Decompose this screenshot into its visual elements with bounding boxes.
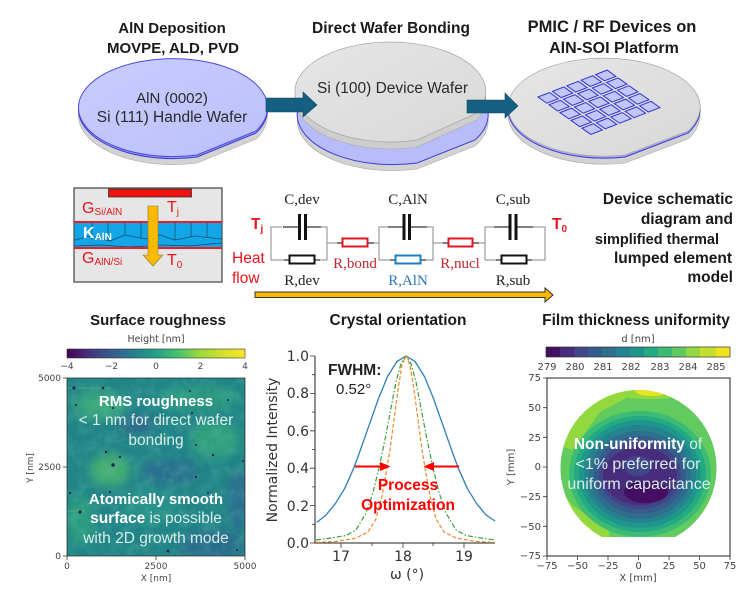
chart: rocking curve: 0.4: [287, 461, 309, 477]
device schematic: T: [167, 199, 177, 216]
thermal lumped element circuit: T: [251, 216, 260, 233]
chart: rocking curve: 18: [394, 549, 412, 565]
callout: non-uniformity: <1% preferred for: [576, 456, 701, 473]
thermal lumped element circuit: C,sub: [496, 192, 530, 208]
chart: rocking curve: 1.0: [287, 349, 309, 365]
curve: optimized: [316, 356, 495, 542]
callout: atomically smooth: with 2D growth mode: [82, 530, 229, 547]
chart: AFM height map: 5000: [38, 374, 61, 384]
process optimization label: Process: [378, 477, 438, 494]
caption: device schematic: model: [687, 269, 733, 286]
callout: non-uniformity: [567, 436, 711, 493]
chart: thickness wafer map: 283: [650, 362, 670, 373]
chart: AFM height map: −2: [105, 362, 118, 372]
device schematic: j: [176, 207, 179, 218]
callout: RMS roughness: < 1 nm for direct wafer: [79, 412, 233, 429]
chart: thickness wafer map: −50: [520, 522, 541, 533]
thermal lumped element circuit: R,sub: [496, 273, 530, 289]
caption: device schematic: simplified thermal: [595, 232, 719, 248]
chart: thickness wafer map: 284: [678, 362, 698, 373]
chart: rocking curve: ω (°): [390, 567, 424, 583]
arrow: narrowing from right: [426, 464, 459, 470]
title: direct wafer bonding: Direct Wafer Bonding: [312, 20, 470, 37]
wafer: bonded device wafer: [295, 42, 488, 171]
chart: AFM height map: Y [nm]: [26, 453, 36, 484]
wafer: AlN on handle wafer: AlN (0002): [136, 90, 208, 107]
chart: thickness wafer map: [506, 334, 736, 584]
device schematic: AlN: [95, 232, 112, 243]
chart: rocking curve: 0.8: [287, 386, 309, 402]
chart: rocking curve: 19: [455, 549, 473, 565]
wafer: bonded device wafer: Si (100) Device Wafer: [317, 80, 468, 97]
chart: thickness wafer map: Y [mm]: [506, 449, 517, 486]
chart: thickness wafer map: 50: [693, 561, 706, 572]
device schematic: G: [82, 250, 94, 267]
FWHM label: FWHM:: [328, 362, 381, 379]
title: PMIC / RF devices: PMIC / RF Devices on: [528, 18, 696, 36]
heat flow label: Heat: [232, 250, 265, 267]
thermal lumped element circuit: R,nucl: [440, 256, 480, 272]
chart: rocking curve: 17: [332, 549, 350, 565]
device schematic: 0: [177, 260, 183, 271]
colorbar: thickness: [546, 347, 730, 357]
device schematic: G: [82, 200, 94, 217]
chart: thickness wafer map: 50: [528, 403, 541, 414]
FWHM label: [328, 362, 381, 398]
chart: thickness wafer map: 279: [537, 362, 557, 373]
chart: thickness wafer map: 281: [593, 362, 613, 373]
thermal lumped element circuit: 0: [561, 224, 567, 235]
chart: thickness wafer map: 75: [724, 561, 736, 572]
chart: thickness wafer map: −75: [536, 561, 558, 572]
process optimization label: Optimization: [361, 497, 455, 514]
chart: thickness wafer map: 0: [635, 561, 642, 572]
height map image: [66, 378, 252, 559]
thermal lumped element circuit: R,bond: [333, 256, 377, 272]
chart: AFM height map: 2: [198, 362, 203, 372]
device array: [538, 70, 660, 134]
callout: non-uniformity: uniform capacitance: [567, 476, 711, 493]
curve: as-grown: [317, 356, 495, 522]
title: PMIC / RF devices: [528, 18, 696, 57]
chart: AFM height map: [26, 334, 257, 584]
device schematic: K: [83, 225, 95, 242]
device schematic: [74, 188, 222, 282]
chart: thickness wafer map: −25: [597, 561, 619, 572]
chart: rocking curve: 0.0: [287, 536, 309, 552]
chart: thickness wafer map: 25: [528, 433, 541, 444]
device schematic: T: [167, 252, 177, 269]
device schematic: AlN/Si: [94, 257, 122, 268]
chart: rocking curve: Normalized Intensity: [265, 378, 281, 522]
chart: AFM height map: 2500: [145, 562, 168, 572]
thermal lumped element circuit: [251, 192, 567, 289]
thermal lumped element circuit: R,AlN: [388, 273, 428, 289]
callout: atomically smooth: surface is possible: [90, 510, 222, 527]
chart: thickness wafer map: d [nm]: [621, 334, 655, 345]
chart: AFM height map: 0: [153, 362, 159, 372]
caption: device schematic: [595, 191, 733, 286]
heading: crystal orientation: Crystal orientation: [330, 312, 466, 329]
device schematic: Si/AlN: [94, 207, 122, 218]
chart: AFM height map: −4: [60, 362, 74, 372]
wafer: AlN on handle wafer: Si (111) Handle Wafer: [97, 109, 247, 126]
chart: thickness wafer map: X [mm]: [619, 573, 657, 584]
resistors: [290, 256, 314, 264]
chart: thickness wafer map: 0: [535, 462, 541, 473]
chart: thickness wafer map: 25: [663, 561, 675, 572]
callout: non-uniformity: Non-uniformity of: [574, 436, 703, 453]
callout: atomically smooth: [82, 491, 229, 547]
thermal lumped element circuit: R,dev: [284, 273, 320, 289]
caption: device schematic: lumped element: [614, 250, 732, 267]
process optimization label: [361, 477, 455, 514]
chart: AFM height map: Height [nm]: [127, 334, 185, 345]
heading: surface roughness: Surface roughness: [90, 312, 226, 329]
callout: RMS roughness: [79, 393, 233, 449]
caption: device schematic: Device schematic: [603, 191, 733, 208]
title: AlN deposition: AlN Deposition: [118, 20, 226, 37]
chart: AFM height map: X [nm]: [141, 574, 171, 584]
chart: thickness wafer map: −75: [520, 551, 541, 562]
arrow: narrowing from left: [355, 464, 388, 470]
chart: thickness wafer map: 282: [621, 362, 641, 373]
caption: device schematic: diagram and: [641, 211, 733, 228]
chart: rocking curve: [265, 349, 495, 583]
thermal lumped element circuit: T: [552, 216, 561, 233]
wafer contour map: [560, 390, 716, 537]
chart: thickness wafer map: −50: [567, 561, 588, 572]
callout: atomically smooth: Atomically smooth: [89, 491, 223, 508]
capacitors: [300, 214, 516, 240]
chart: thickness wafer map: 75: [528, 373, 541, 384]
chart: AFM height map: 0: [64, 562, 70, 572]
arrow: bonding to devices: [467, 93, 518, 118]
thermal lumped element circuit: j: [259, 224, 263, 235]
chart: AFM height map: 2500: [38, 463, 61, 473]
thermal lumped element circuit: C,AlN: [388, 192, 428, 208]
wafer: AlN-SOI platform with devices: [508, 58, 700, 164]
chart: thickness wafer map: 280: [565, 362, 585, 373]
arrow: heat flow: [255, 288, 553, 302]
curve: intermediate: [316, 356, 495, 540]
chart: rocking curve: 0.2: [287, 499, 309, 515]
heat flow arrow in device: [143, 206, 163, 266]
thermal lumped element circuit: C,dev: [284, 192, 320, 208]
title: AlN deposition: [107, 20, 239, 57]
title: PMIC / RF devices: AlN-SOI Platform: [549, 40, 679, 57]
chart: AFM height map: 0: [55, 552, 61, 562]
callout: RMS roughness: bonding: [128, 432, 184, 449]
chart: thickness wafer map: −25: [520, 492, 541, 503]
chart: rocking curve: 0.6: [287, 424, 309, 440]
chart: AFM height map: 5000: [234, 562, 257, 572]
FWHM label: 0.52°: [336, 381, 371, 398]
heat flow label: [232, 250, 265, 287]
wafer: AlN on handle wafer: [78, 59, 267, 165]
heading: film thickness uniformity: Film thickness uniformity: [542, 312, 730, 329]
chart: AFM height map: 4: [242, 362, 248, 372]
callout: RMS roughness: RMS roughness: [99, 393, 213, 410]
arrow: deposition to bonding: [266, 92, 317, 117]
title: AlN deposition: MOVPE, ALD, PVD: [107, 40, 239, 57]
heat flow label: flow: [232, 270, 260, 287]
chart: thickness wafer map: 285: [706, 362, 726, 373]
colorbar: height: [67, 349, 245, 358]
